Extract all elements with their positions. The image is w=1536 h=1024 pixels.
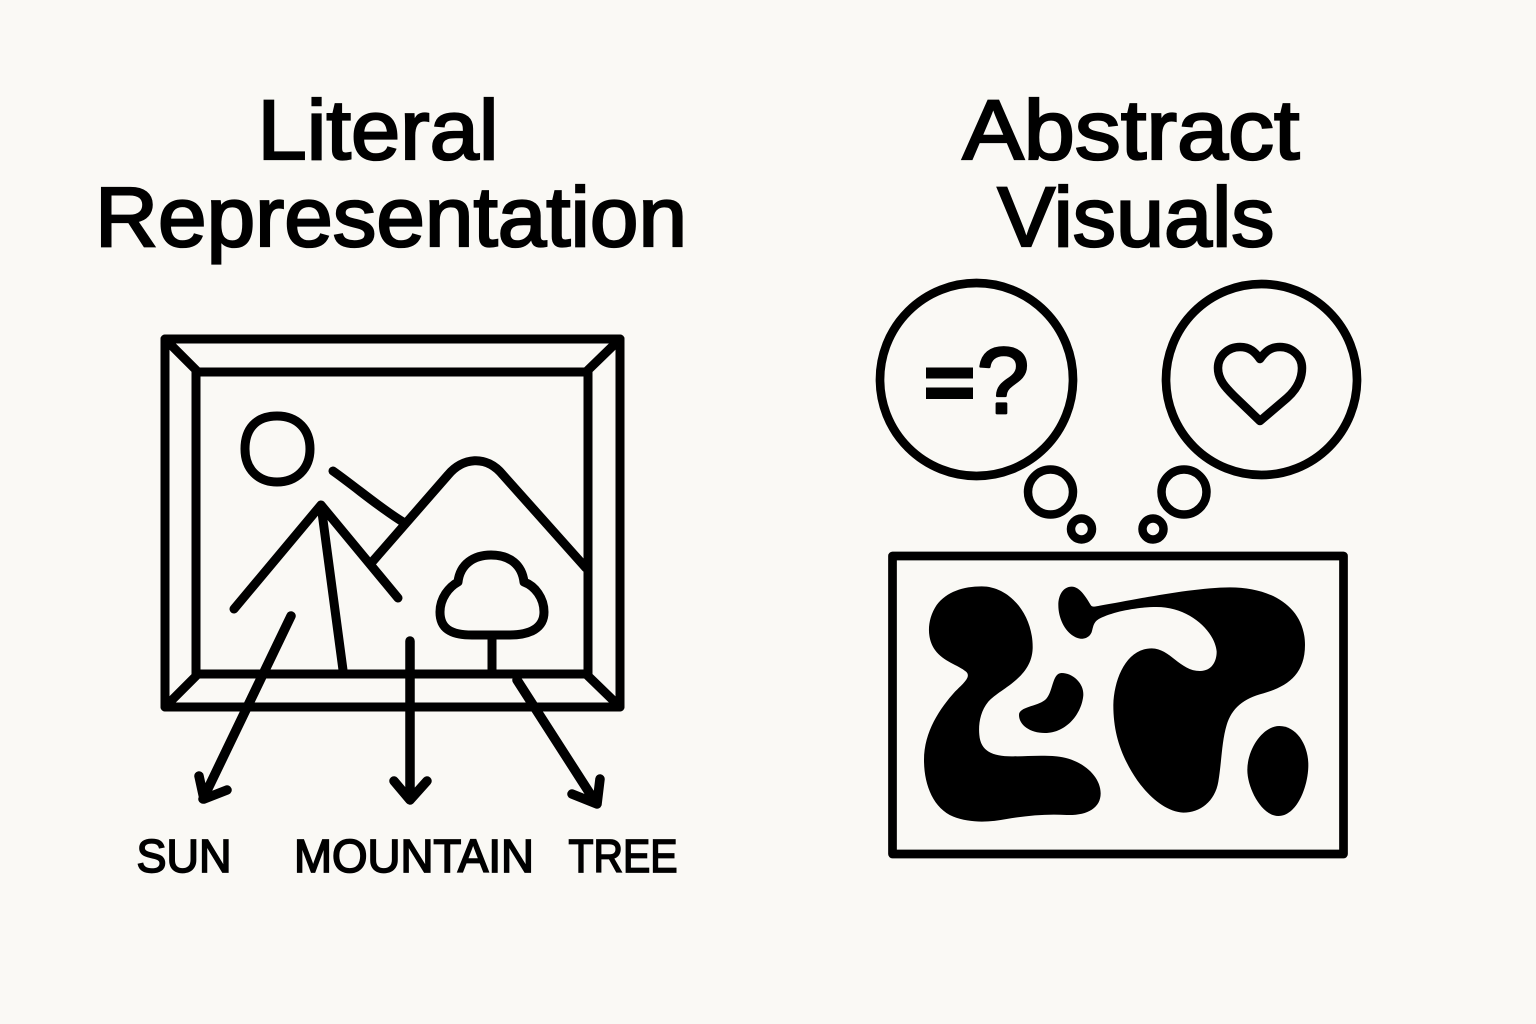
panel: framed picture xyxy=(165,339,620,804)
thought trail: left xyxy=(1028,470,1092,540)
thought bubble: equals and question mark xyxy=(880,283,1073,476)
arrow: mountain xyxy=(394,641,427,800)
heading: Literal Representation: Representation xyxy=(95,170,687,264)
thought trail: right xyxy=(1142,470,1206,540)
arrow: sun xyxy=(199,616,291,799)
symbol: question mark: ? xyxy=(977,328,1029,433)
heading: Literal Representation: Literal xyxy=(258,83,498,177)
heading: Abstract Visuals xyxy=(962,83,1300,264)
blob: oval xyxy=(1247,726,1308,816)
blob: centre xyxy=(1019,673,1083,733)
icon: mountain xyxy=(333,461,586,568)
blob: left xyxy=(924,586,1101,822)
picture frame xyxy=(165,339,620,707)
arrow: tree xyxy=(517,680,600,804)
icon: sun xyxy=(245,416,310,482)
heading: Abstract Visuals: Abstract xyxy=(962,83,1300,177)
icon: person-like peak xyxy=(234,505,398,670)
abstract blobs xyxy=(924,586,1308,822)
label: MOUNTAIN: MOUNTAIN xyxy=(294,830,534,882)
label: TREE: TREE xyxy=(568,830,678,882)
heading: Abstract Visuals: Visuals xyxy=(998,170,1274,264)
blob: connected top and right xyxy=(1058,587,1305,813)
heading: Literal Representation xyxy=(95,83,687,264)
symbol: equals xyxy=(926,368,973,399)
icon: tree xyxy=(440,555,544,670)
icon: heart xyxy=(1218,347,1302,421)
panel: abstract frame xyxy=(892,556,1344,854)
label: SUN: SUN xyxy=(136,830,232,882)
thought bubble: heart xyxy=(1166,284,1357,475)
